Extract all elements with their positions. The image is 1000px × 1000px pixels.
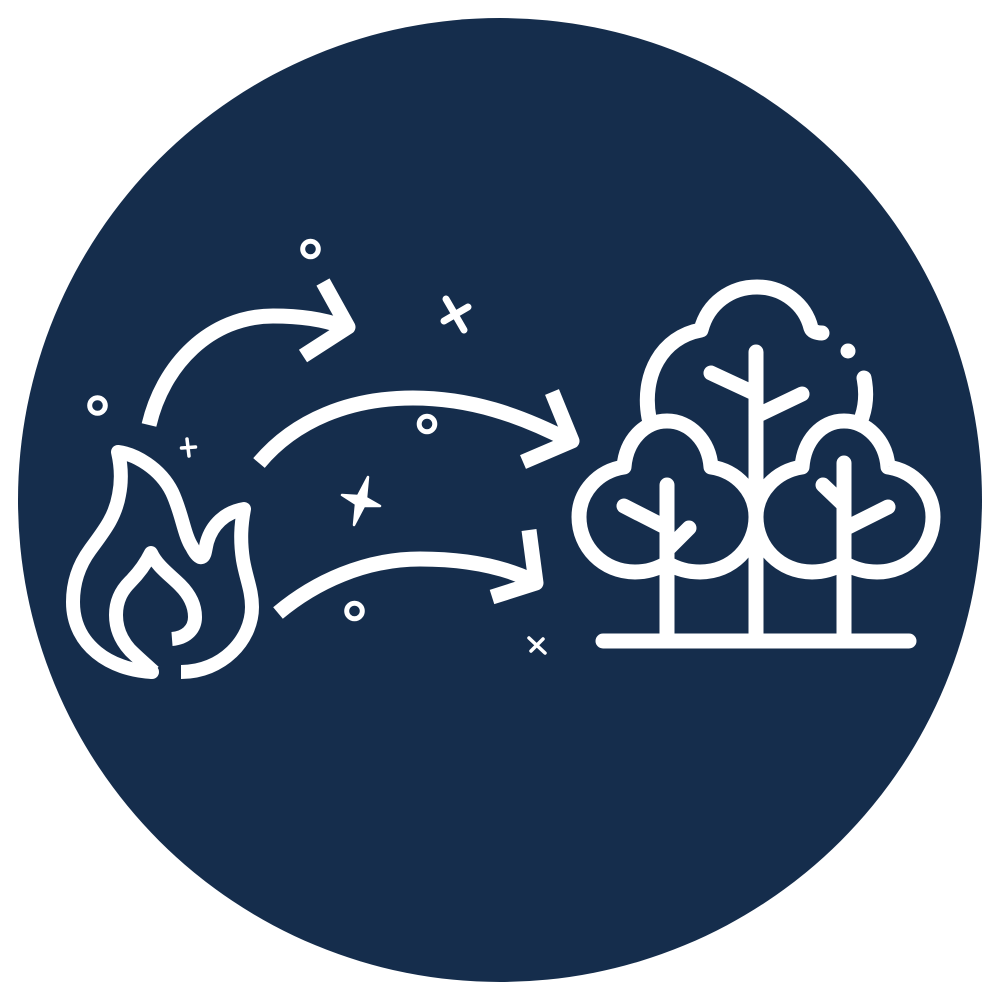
icon: trees <box>579 287 933 641</box>
left tree trunk <box>624 485 689 641</box>
back tree trunk <box>711 352 802 641</box>
back tree crown dot <box>840 344 856 358</box>
right tree trunk <box>823 463 888 641</box>
left tree crown <box>579 421 756 572</box>
ground <box>603 634 909 648</box>
back tree crown fragment <box>862 378 866 417</box>
decorative sparkles: rings <box>90 241 435 619</box>
arrow: middle <box>259 392 572 463</box>
decorative sparkles: stars <box>182 299 545 653</box>
icon: flame <box>73 452 252 679</box>
arrow: top <box>149 282 348 425</box>
arrow: bottom <box>278 530 536 613</box>
back tree crown <box>647 287 822 418</box>
right tree crown <box>756 421 933 572</box>
